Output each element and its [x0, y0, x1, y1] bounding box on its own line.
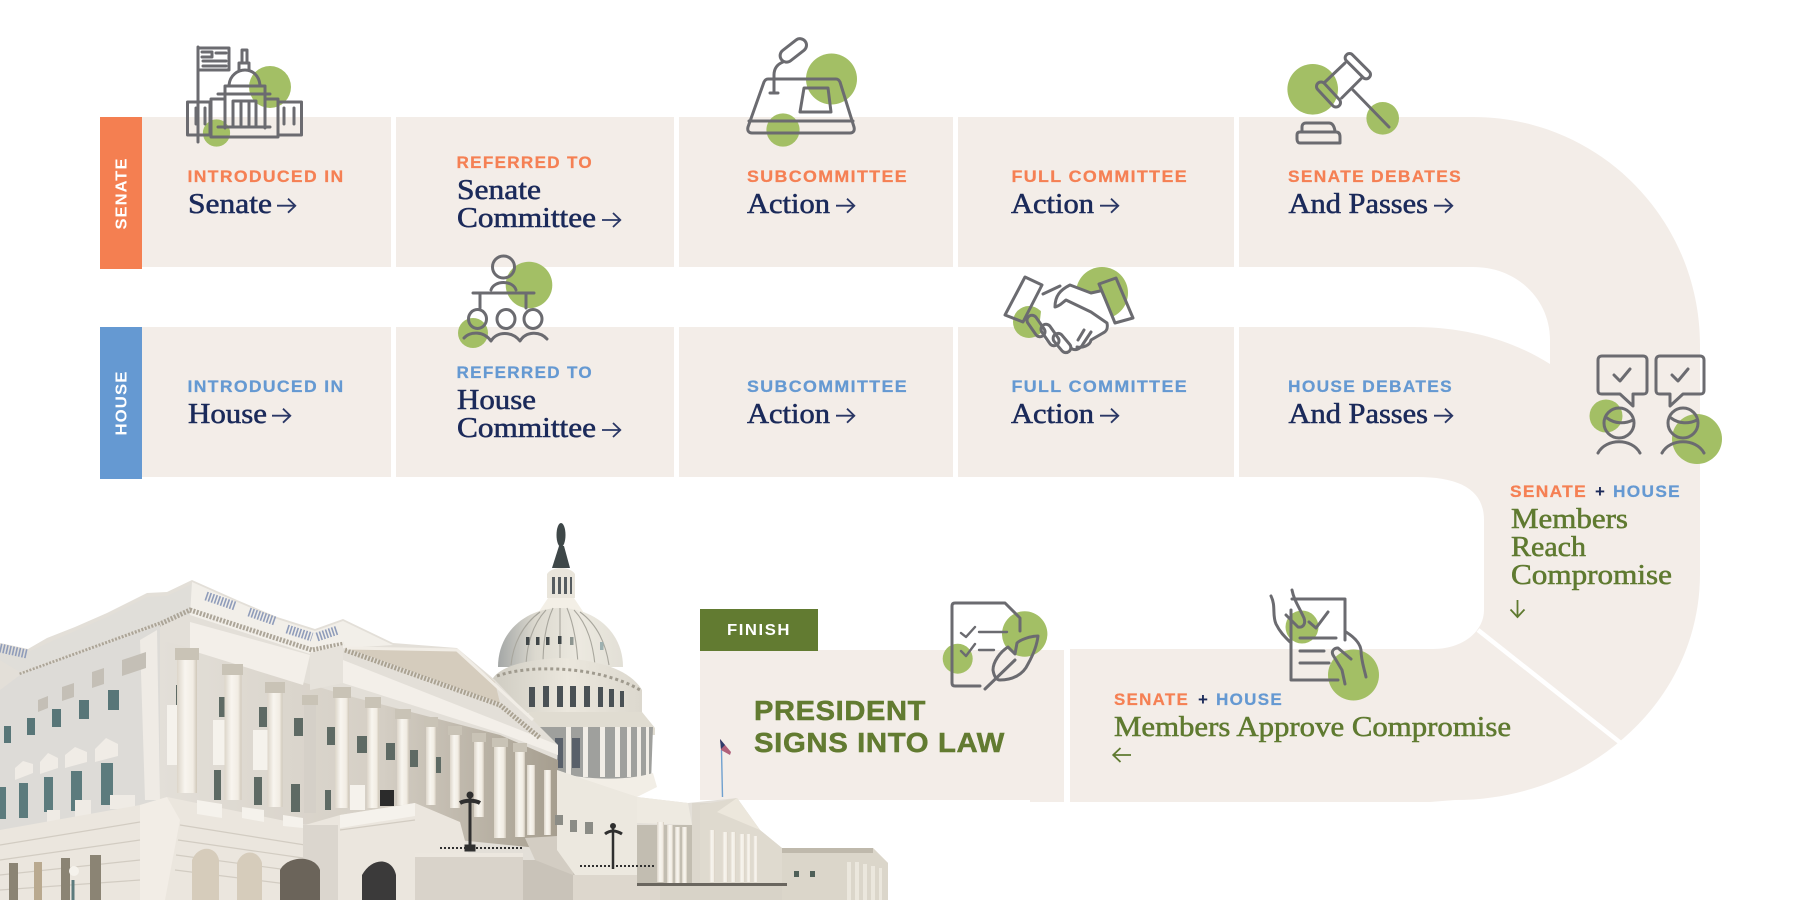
icon: two members with check speech bubbles [1590, 356, 1722, 464]
icon: gavel [1287, 52, 1399, 143]
dome [493, 523, 657, 797]
right wing portico [700, 798, 782, 885]
step: introduced in senate: Senate [188, 189, 272, 220]
step: senate full committee action: FULL COMMITTEE [1012, 167, 1188, 186]
step: president signs into law: SIGNS INTO LAW [754, 727, 1005, 758]
step: members reach compromise [1510, 482, 1681, 617]
step: introduced in house: INTRODUCED IN [188, 377, 344, 396]
step: members approve compromise: HOUSE [1216, 690, 1283, 709]
step: introduced in senate [188, 167, 344, 220]
senate tab [100, 117, 142, 269]
step: house full committee action [1011, 377, 1188, 430]
terrace plinth and stairs [415, 835, 660, 900]
step: members approve compromise [1113, 690, 1511, 762]
senate tab: SENATE [114, 158, 130, 230]
colonnade back wall [160, 640, 558, 850]
house tab: HOUSE [114, 370, 130, 436]
column capitals [175, 648, 527, 752]
bottom ground strip [637, 883, 787, 900]
step: senate debates and passes: And Passes [1288, 189, 1428, 220]
panel: house row boxes [142, 327, 1234, 477]
icon: committee audience [458, 256, 552, 348]
step: house subcommittee action: SUBCOMMITTEE [747, 377, 908, 396]
step: senate debates and passes [1288, 167, 1462, 220]
step: members approve compromise: Members Approve Compromise [1114, 712, 1511, 743]
step: senate subcommittee action: Action [747, 189, 830, 220]
step: members reach compromise: + [1595, 482, 1605, 501]
far wing [782, 848, 888, 900]
step: senate subcommittee action [747, 167, 908, 220]
step: house full committee action: Action [1011, 399, 1094, 430]
lamp posts and railings [440, 792, 655, 869]
step: house subcommittee action [747, 377, 908, 430]
house tab [100, 327, 142, 479]
step: members reach compromise: Members [1511, 504, 1628, 535]
step: members reach compromise: SENATE [1510, 482, 1587, 501]
main building mass [0, 580, 888, 900]
step: members reach compromise: Compromise [1511, 560, 1672, 591]
panel: president signs box [700, 650, 1064, 802]
panel: curved path from debates to compromise [1070, 117, 1700, 802]
step: referred to senate committee: Senate [457, 175, 541, 206]
step: referred to senate committee: Committee [457, 203, 596, 234]
step: house debates and passes [1288, 377, 1453, 430]
step: referred to house committee [456, 363, 620, 444]
image: US Capitol building [0, 523, 888, 900]
flag on the wing [720, 739, 731, 797]
step: referred to house committee: Committee [457, 413, 596, 444]
step: introduced in house [188, 377, 344, 430]
step: house debates and passes: And Passes [1288, 399, 1428, 430]
step: senate subcommittee action: SUBCOMMITTEE [747, 167, 908, 186]
step: members reach compromise: HOUSE [1613, 482, 1681, 501]
step: senate full committee action: Action [1011, 189, 1094, 220]
step: members approve compromise: SENATE [1114, 690, 1189, 709]
panel: senate row boxes [142, 117, 1234, 267]
icon: document and quill [943, 603, 1047, 689]
step: house subcommittee action: Action [747, 399, 830, 430]
columns [177, 657, 551, 838]
step: house full committee action: FULL COMMITTEE [1012, 377, 1188, 396]
step: referred to house committee: REFERRED TO [456, 363, 593, 382]
step: referred to senate committee: REFERRED TO [456, 153, 593, 172]
step: members reach compromise: Reach [1511, 532, 1586, 563]
step: introduced in house: House [188, 399, 267, 430]
finish tag: FINISH [727, 622, 791, 639]
icon: capitol with flag [188, 47, 302, 147]
step: referred to house committee: House [457, 385, 536, 416]
step: house debates and passes: HOUSE DEBATES [1288, 377, 1453, 396]
middle wing [555, 770, 712, 883]
entablature [190, 622, 558, 755]
step: senate debates and passes: SENATE DEBATES [1288, 167, 1462, 186]
colonnade lit wall patches [167, 705, 365, 810]
divider between compromise panels [1478, 630, 1622, 744]
step: introduced in senate: INTRODUCED IN [188, 167, 344, 186]
icon: document held in two hands [1271, 590, 1379, 700]
icon: lectern with microphone [748, 36, 857, 147]
step: senate full committee action [1011, 167, 1188, 220]
colonnade windows [176, 685, 441, 812]
finish tag [700, 609, 818, 651]
step: members approve compromise: + [1198, 690, 1208, 709]
step: referred to senate committee [456, 153, 620, 234]
step: president signs into law: PRESIDENT [754, 695, 926, 726]
step: president signs into law [754, 695, 1005, 758]
left facade [0, 625, 160, 830]
base storey [0, 797, 470, 900]
attic and balustrades [0, 582, 393, 675]
icon: handshake [1005, 267, 1133, 355]
